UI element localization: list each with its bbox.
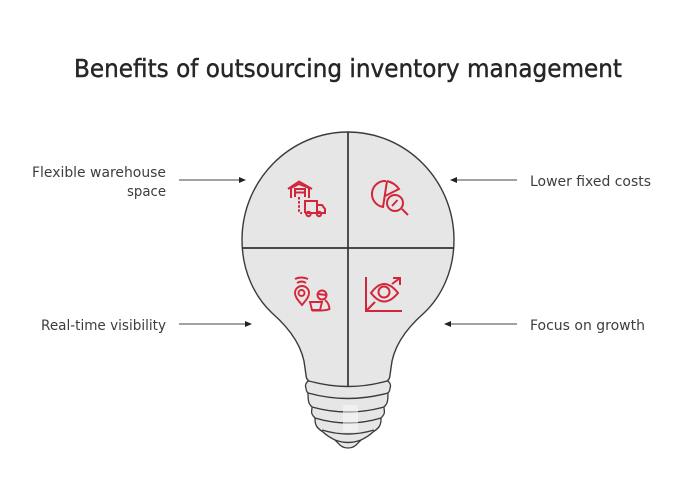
- arrow: focus on growth: [444, 321, 517, 327]
- icon: pie chart with magnifier: [372, 181, 408, 215]
- bulb glass: [242, 132, 454, 386]
- arrow: real-time visibility: [179, 321, 252, 327]
- icon: eye on growth chart: [366, 277, 402, 311]
- icon: location pin, signal and person with laptop: [295, 278, 330, 311]
- title: Benefits of outsourcing inventory management: [74, 54, 622, 83]
- label: real-time visibility: Real-time visibility: [41, 318, 166, 334]
- label: focus on growth: Focus on growth: [530, 318, 645, 334]
- icon: warehouse and truck: [288, 182, 325, 216]
- arrow: lower fixed costs: [450, 177, 517, 183]
- label: flexible warehouse space: space: [127, 184, 166, 200]
- arrow: flexible warehouse space: [179, 177, 246, 183]
- label: lower fixed costs: Lower fixed costs: [530, 174, 651, 190]
- bulb quadrant dividers: [242, 132, 454, 386]
- light bulb: [242, 132, 454, 448]
- label: flexible warehouse space: Flexible warehouse: [32, 165, 166, 181]
- bulb screw base: [305, 381, 391, 448]
